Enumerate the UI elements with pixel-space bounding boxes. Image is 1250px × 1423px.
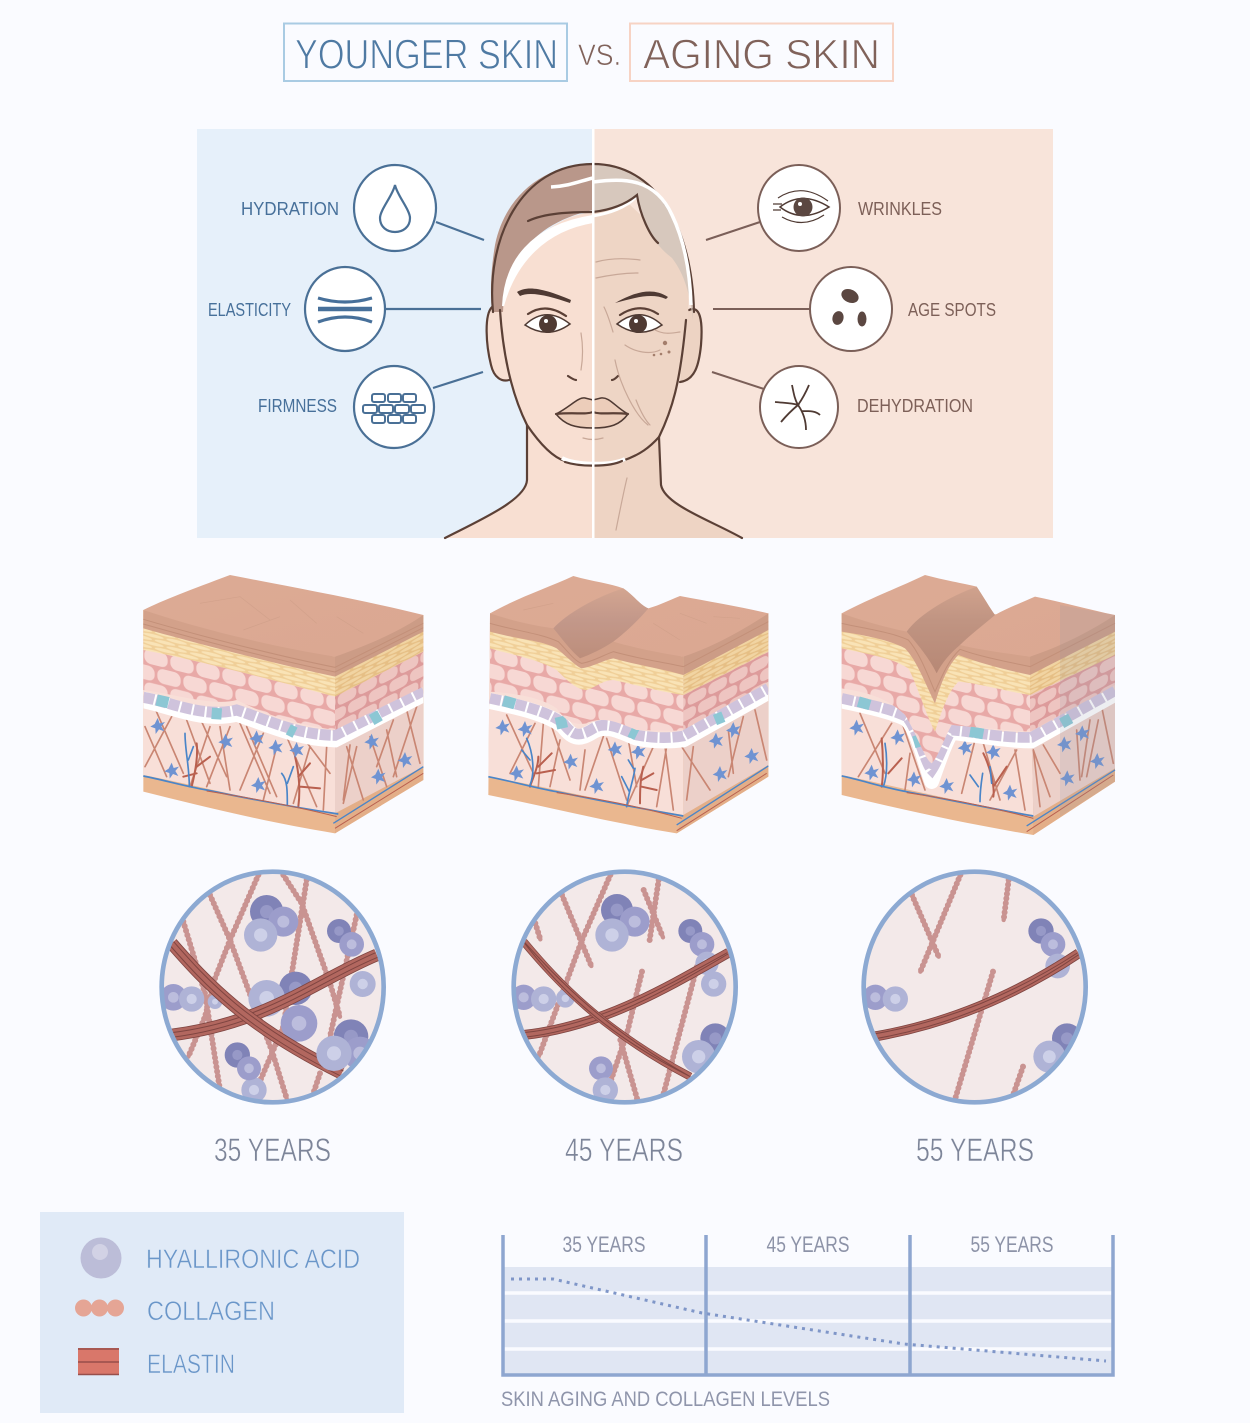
magnified view: 55 years [863, 872, 1086, 1102]
label: 45 years: 45 YEARS [565, 1132, 683, 1168]
legend: elastin: ELASTIN [147, 1349, 235, 1379]
legend: hyaluronic acid [80, 1238, 360, 1278]
chart caption: SKIN AGING AND COLLAGEN LEVELS [501, 1387, 830, 1411]
panel: legend [40, 1212, 404, 1413]
factor: elasticity [208, 267, 481, 351]
skin cross-section: 35 years [143, 575, 423, 833]
label: 55 years: 55 YEARS [916, 1132, 1034, 1168]
heading: younger skin: YOUNGER SKIN [295, 30, 558, 78]
chart axes [503, 1235, 1113, 1375]
chart column label 55: 55 YEARS [970, 1232, 1054, 1257]
factor: hydration [241, 165, 484, 251]
factor: dehydration [712, 366, 973, 448]
illustration: half young half aged face [445, 164, 742, 538]
factor: age spots: AGE SPOTS [908, 300, 996, 320]
legend: collagen [75, 1296, 275, 1326]
title [284, 24, 893, 81]
aging background [593, 129, 1053, 538]
chart column label 45: 45 YEARS [766, 1232, 850, 1257]
label: 35 years: 35 YEARS [214, 1132, 331, 1168]
collagen decline dotted line [511, 1279, 1106, 1361]
factor: wrinkles: WRINKLES [858, 199, 942, 219]
centre divider [592, 129, 594, 538]
skin cross-section: 45 years [488, 576, 768, 833]
factor: dehydration: DEHYDRATION [857, 396, 973, 416]
factor: hydration: HYDRATION [241, 199, 339, 219]
chart column label 35: 35 YEARS [562, 1232, 646, 1257]
younger background [197, 129, 593, 538]
chart bands [503, 1267, 1113, 1374]
skin cross-section: 55 years [842, 575, 1115, 835]
legend: elastin [78, 1348, 235, 1379]
magnified view: 45 years [511, 872, 736, 1103]
heading: aging skin: AGING SKIN [643, 30, 880, 78]
legend: collagen: COLLAGEN [147, 1296, 275, 1326]
legend: hyaluronic acid: HYALLIRONIC ACID [146, 1244, 360, 1274]
factor: elasticity: ELASTICITY [208, 300, 291, 320]
factor: firmness: FIRMNESS [258, 396, 337, 416]
heading: vs: VS. [578, 39, 621, 72]
chart: skin aging and collagen levels [501, 1232, 1113, 1411]
factor: age spots [713, 267, 996, 351]
heading: younger skin [284, 24, 567, 81]
magnified view: 35 years [160, 872, 384, 1103]
panel: face comparison [197, 129, 1053, 538]
factor: firmness [258, 366, 483, 448]
factor: wrinkles [706, 165, 942, 251]
